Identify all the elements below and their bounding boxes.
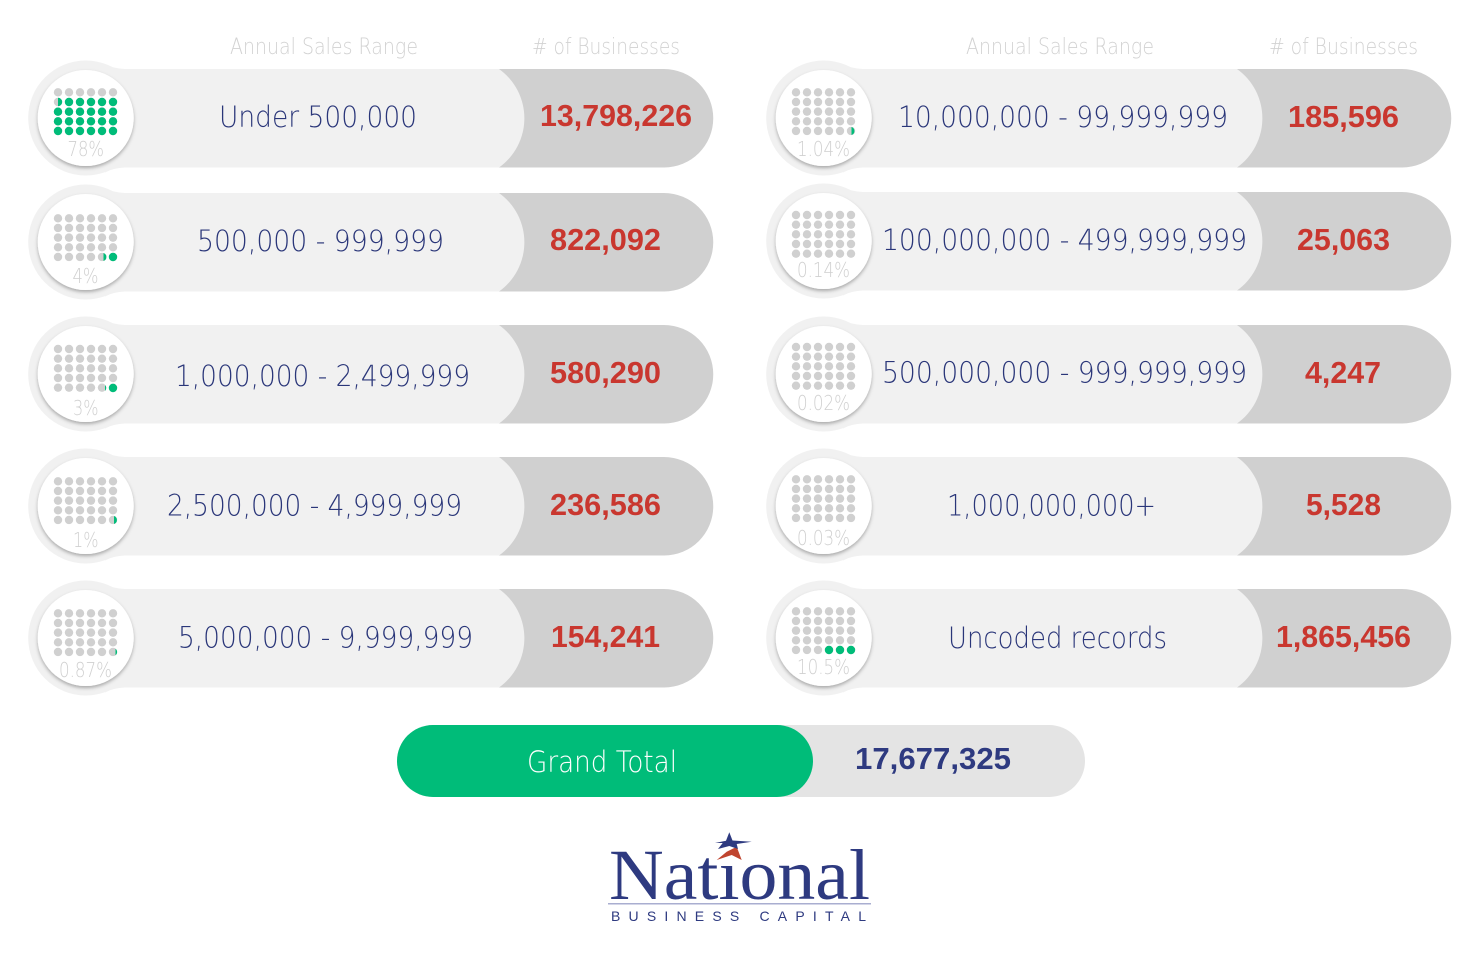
grand total label: Grand Total bbox=[527, 745, 677, 779]
panel: 1,000,000 - 2,499,999 bbox=[28, 316, 713, 432]
icon: dot grid 0.14% bbox=[792, 211, 855, 258]
icon: dot grid 0.03% bbox=[792, 475, 855, 522]
percent label: 3% bbox=[73, 396, 98, 420]
business count: 4,247 bbox=[1305, 355, 1381, 390]
range label: 2,500,000 - 4,999,999 bbox=[167, 488, 462, 522]
heading: annual sales range: Annual Sales Range bbox=[966, 35, 1154, 60]
range label: 1,000,000,000+ bbox=[947, 488, 1156, 522]
business count: 580,290 bbox=[550, 355, 661, 390]
panel: uncoded records bbox=[766, 580, 1451, 696]
business count: 236,586 bbox=[550, 487, 661, 522]
column headers: left bbox=[230, 35, 680, 60]
percent label: 1.04% bbox=[797, 137, 850, 161]
business count: 1,865,456 bbox=[1276, 619, 1411, 654]
percent label: 0.02% bbox=[797, 391, 850, 415]
icon: dot grid 3% bbox=[54, 345, 117, 392]
panel: grand total bbox=[397, 725, 1085, 797]
panel: under 500,000 bbox=[28, 60, 713, 176]
range label: 10,000,000 - 99,999,999 bbox=[898, 100, 1228, 134]
panel: 1,000,000,000+ bbox=[766, 448, 1451, 564]
panel: 500,000 - 999,999 bbox=[28, 184, 713, 300]
range label: Uncoded records bbox=[948, 621, 1167, 655]
range label: 500,000,000 - 999,999,999 bbox=[882, 356, 1247, 390]
range label: Under 500,000 bbox=[219, 100, 417, 134]
panel: 10,000,000 - 99,999,999 bbox=[766, 60, 1451, 176]
business count: 154,241 bbox=[551, 619, 660, 654]
percent label: 0.03% bbox=[797, 526, 850, 550]
range label: 100,000,000 - 499,999,999 bbox=[882, 223, 1247, 257]
percent label: 4% bbox=[72, 264, 98, 288]
total track bbox=[397, 725, 1085, 797]
icon: dot grid 78% bbox=[54, 88, 117, 135]
icon: navy star bbox=[715, 832, 752, 849]
heading: number of businesses: # of Businesses bbox=[532, 35, 680, 60]
icon: dot grid 0.87% bbox=[54, 609, 117, 656]
logo wordmark: National bbox=[609, 835, 870, 915]
panel: 2,500,000 - 4,999,999 bbox=[28, 448, 713, 564]
business count: 13,798,226 bbox=[540, 98, 692, 133]
panel: 5,000,000 - 9,999,999 bbox=[28, 580, 713, 696]
percent label: 0.87% bbox=[59, 658, 112, 682]
business count: 5,528 bbox=[1306, 487, 1381, 522]
green label pill bbox=[397, 725, 813, 797]
icon: dot grid 10.5% bbox=[792, 607, 855, 654]
column headers: right bbox=[966, 35, 1418, 60]
percent label: 1% bbox=[73, 528, 98, 552]
business count: 25,063 bbox=[1297, 222, 1390, 257]
logo tagline: BUSINESS CAPITAL bbox=[611, 908, 866, 924]
icon: dot grid 4% bbox=[54, 214, 117, 261]
grand total value: 17,677,325 bbox=[855, 741, 1011, 776]
icon: dot grid 1% bbox=[54, 477, 117, 524]
icon: dot grid 1.04% bbox=[792, 88, 855, 135]
icon: red swoosh bbox=[717, 847, 742, 860]
logo: National Business Capital bbox=[608, 832, 871, 924]
business count: 822,092 bbox=[550, 222, 661, 257]
heading: number of businesses: # of Businesses bbox=[1269, 35, 1418, 60]
logo i-dot mask bbox=[724, 846, 741, 860]
percent label: 10.5% bbox=[797, 655, 850, 679]
range label: 5,000,000 - 9,999,999 bbox=[178, 620, 473, 654]
business count: 185,596 bbox=[1288, 99, 1399, 134]
percent label: 78% bbox=[68, 137, 104, 161]
panel: 500,000,000 - 999,999,999 bbox=[766, 316, 1451, 432]
panel: 100,000,000 - 499,999,999 bbox=[766, 184, 1451, 298]
range label: 1,000,000 - 2,499,999 bbox=[175, 359, 470, 393]
heading: annual sales range: Annual Sales Range bbox=[230, 35, 418, 60]
icon: dot grid 0.02% bbox=[792, 343, 855, 390]
percent label: 0.14% bbox=[797, 258, 850, 282]
range label: 500,000 - 999,999 bbox=[197, 224, 444, 258]
logo rule bbox=[608, 903, 871, 904]
